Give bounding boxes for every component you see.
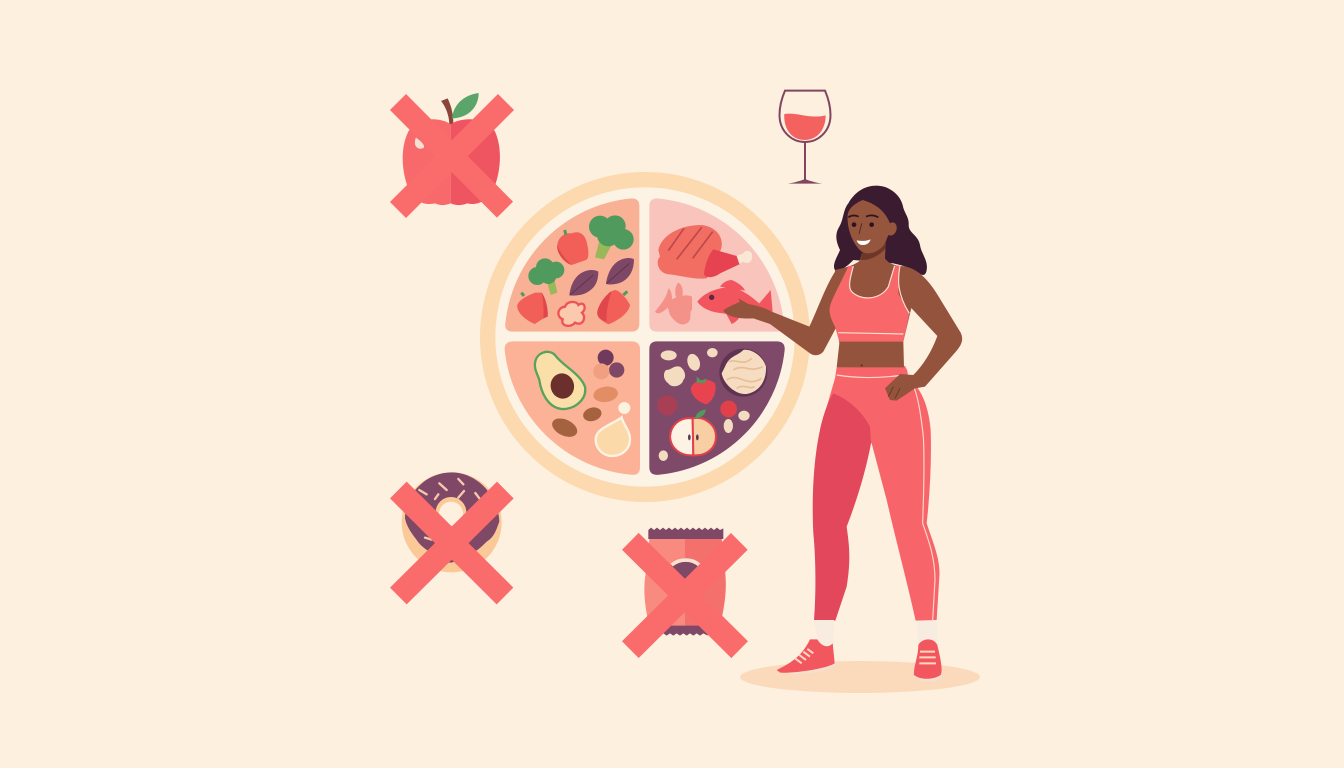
face	[848, 200, 897, 253]
light leg	[820, 366, 939, 621]
sports top	[830, 266, 909, 342]
ground shadow	[740, 661, 980, 693]
panel: healthy fats	[505, 341, 640, 475]
legging trim	[837, 375, 935, 620]
plate chart	[480, 172, 810, 502]
icon: crossed-out apple	[398, 93, 506, 210]
panel: whole grains and fruit	[649, 341, 785, 475]
leggings and shoes	[777, 366, 942, 682]
top trim	[838, 266, 909, 334]
plate rim	[480, 172, 810, 502]
navel	[861, 364, 863, 366]
left shoe	[777, 639, 835, 674]
dark leg	[813, 393, 871, 621]
icon: crossed-out snack bar	[630, 528, 740, 650]
woman figure	[723, 186, 962, 682]
facial features	[848, 215, 878, 245]
upper body	[723, 186, 962, 401]
arm on hip	[885, 266, 962, 401]
socks	[813, 620, 834, 648]
icon: wine glass	[780, 91, 830, 184]
panel: protein	[649, 198, 784, 332]
panel: vegetables	[505, 198, 639, 332]
arm pointing at plate	[723, 269, 847, 355]
icon: crossed-out donut	[398, 472, 505, 596]
right shoe	[914, 639, 942, 682]
torso and neck	[833, 243, 912, 367]
hair	[834, 186, 927, 275]
finger lines	[888, 387, 900, 398]
fish	[697, 280, 773, 324]
neck shadow	[861, 242, 886, 260]
